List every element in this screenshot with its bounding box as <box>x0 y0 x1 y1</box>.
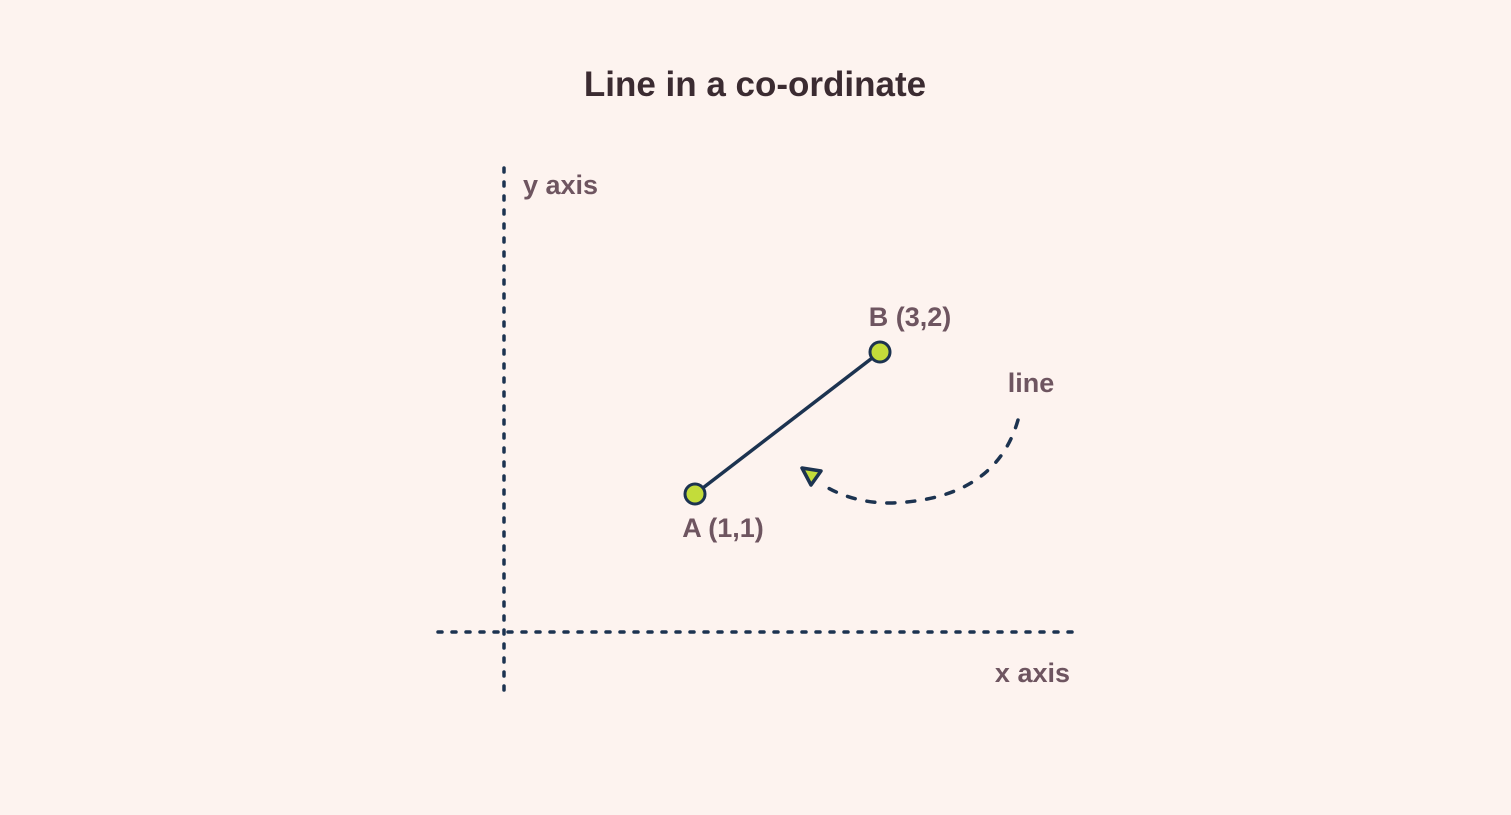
point B <box>870 342 890 362</box>
label B: B (3,2) <box>869 302 951 332</box>
x axis <box>438 630 1073 634</box>
line segment AB <box>685 342 890 504</box>
label A: A (1,1) <box>682 513 764 543</box>
y axis <box>502 168 506 690</box>
arrow: dashed curve <box>802 420 1018 503</box>
x axis label: x axis <box>995 658 1070 688</box>
title: Line in a co-ordinate <box>584 65 926 104</box>
point A <box>685 484 705 504</box>
y axis label: y axis <box>523 170 598 200</box>
line label: line <box>1008 368 1054 398</box>
